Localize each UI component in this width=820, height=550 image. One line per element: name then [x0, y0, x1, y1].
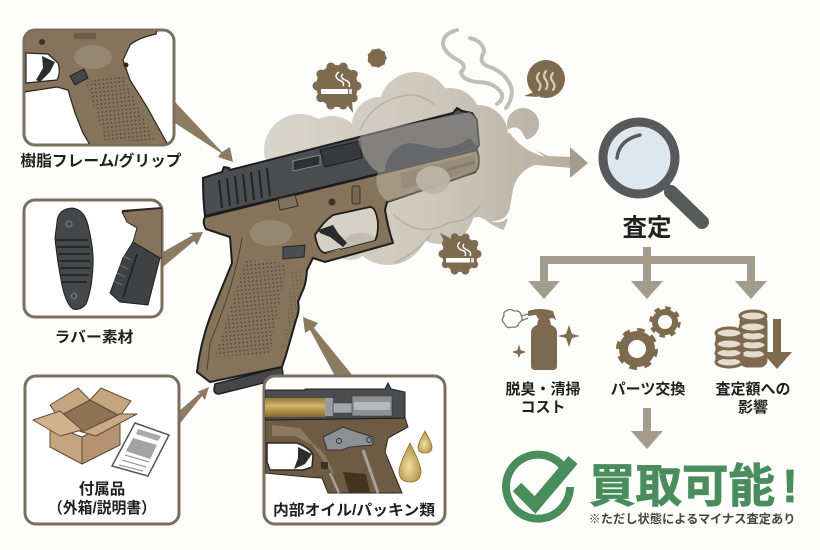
smoke overlay on muzzle — [358, 112, 480, 202]
gun — [197, 108, 480, 394]
callout arrow: internals — [303, 317, 353, 376]
ejection port — [320, 141, 362, 167]
label: accessories: 付属品 — [79, 480, 125, 498]
connector arrows — [528, 247, 767, 299]
icon: cardboard box — [33, 388, 137, 464]
gun frame — [197, 150, 479, 382]
icon: oil drops — [399, 431, 432, 482]
icon: gears — [618, 308, 679, 368]
label: accessories — [48, 480, 156, 517]
panel: internals — [264, 376, 445, 524]
panel: frame and grip — [24, 30, 174, 145]
trigger — [318, 225, 347, 247]
icon: odor bubble — [524, 60, 565, 98]
takedown latch — [352, 186, 360, 204]
label: cleaning cost — [505, 380, 581, 416]
slide — [203, 108, 479, 216]
icon: manual — [112, 423, 169, 476]
label: accessories: （外箱/説明書） — [48, 498, 156, 517]
result heading: ! — [782, 460, 798, 512]
serrations — [219, 168, 270, 208]
close-up frame — [24, 30, 168, 145]
cutaway slide — [265, 383, 405, 420]
barrel — [265, 398, 325, 417]
rubber backstrap — [55, 208, 93, 309]
label: rubber: ラバー素材 — [54, 328, 134, 346]
icon: cigarette bubble top — [316, 65, 358, 113]
thumb swell — [250, 220, 292, 246]
icon: coins and down arrow — [716, 311, 792, 369]
arrow: to result — [631, 408, 663, 449]
smoke wisp — [443, 30, 512, 108]
label: cleaning cost: コスト — [520, 399, 566, 416]
panel: accessories — [25, 376, 179, 524]
heading: assessment: 査定 — [622, 214, 672, 242]
rail — [400, 155, 476, 189]
icon: green check — [506, 455, 573, 519]
spring — [363, 450, 378, 493]
label: internals: 内部オイル/パッキン類 — [273, 502, 435, 519]
label: frame and grip: 樹脂フレーム/グリップ — [20, 151, 182, 170]
slide stop — [278, 195, 298, 210]
arrow: smoke to inspection — [570, 147, 588, 178]
label: value impact: 査定額への — [715, 380, 791, 398]
icon: spray bottle — [502, 309, 580, 370]
label: parts replacement: パーツ交換 — [611, 380, 685, 398]
pin — [328, 198, 336, 206]
smoke cloud — [263, 72, 572, 265]
cutaway frame — [265, 418, 408, 493]
icon: magnifying glass — [603, 122, 702, 222]
icon: small blob — [368, 49, 386, 67]
callout arrow: frame — [175, 102, 233, 162]
grip stippling — [215, 260, 287, 357]
magazine base — [214, 367, 283, 394]
label: value impact: 影響 — [738, 398, 768, 416]
note: ※ただし状態によるマイナス査定あり — [588, 511, 796, 526]
panel: rubber — [24, 200, 162, 317]
rubber grip — [122, 208, 162, 258]
trigger guard opening — [315, 207, 378, 253]
icon: cigarette bubble bottom — [440, 233, 478, 272]
trigger bar — [323, 427, 373, 450]
callout arrow: rubber — [163, 232, 203, 267]
result heading: 買取可能 — [589, 460, 775, 512]
magazine release — [283, 245, 305, 259]
label: cleaning cost: 脱臭・清掃 — [505, 380, 581, 398]
callout arrow: accessories — [178, 387, 209, 426]
label: value impact — [715, 380, 791, 416]
